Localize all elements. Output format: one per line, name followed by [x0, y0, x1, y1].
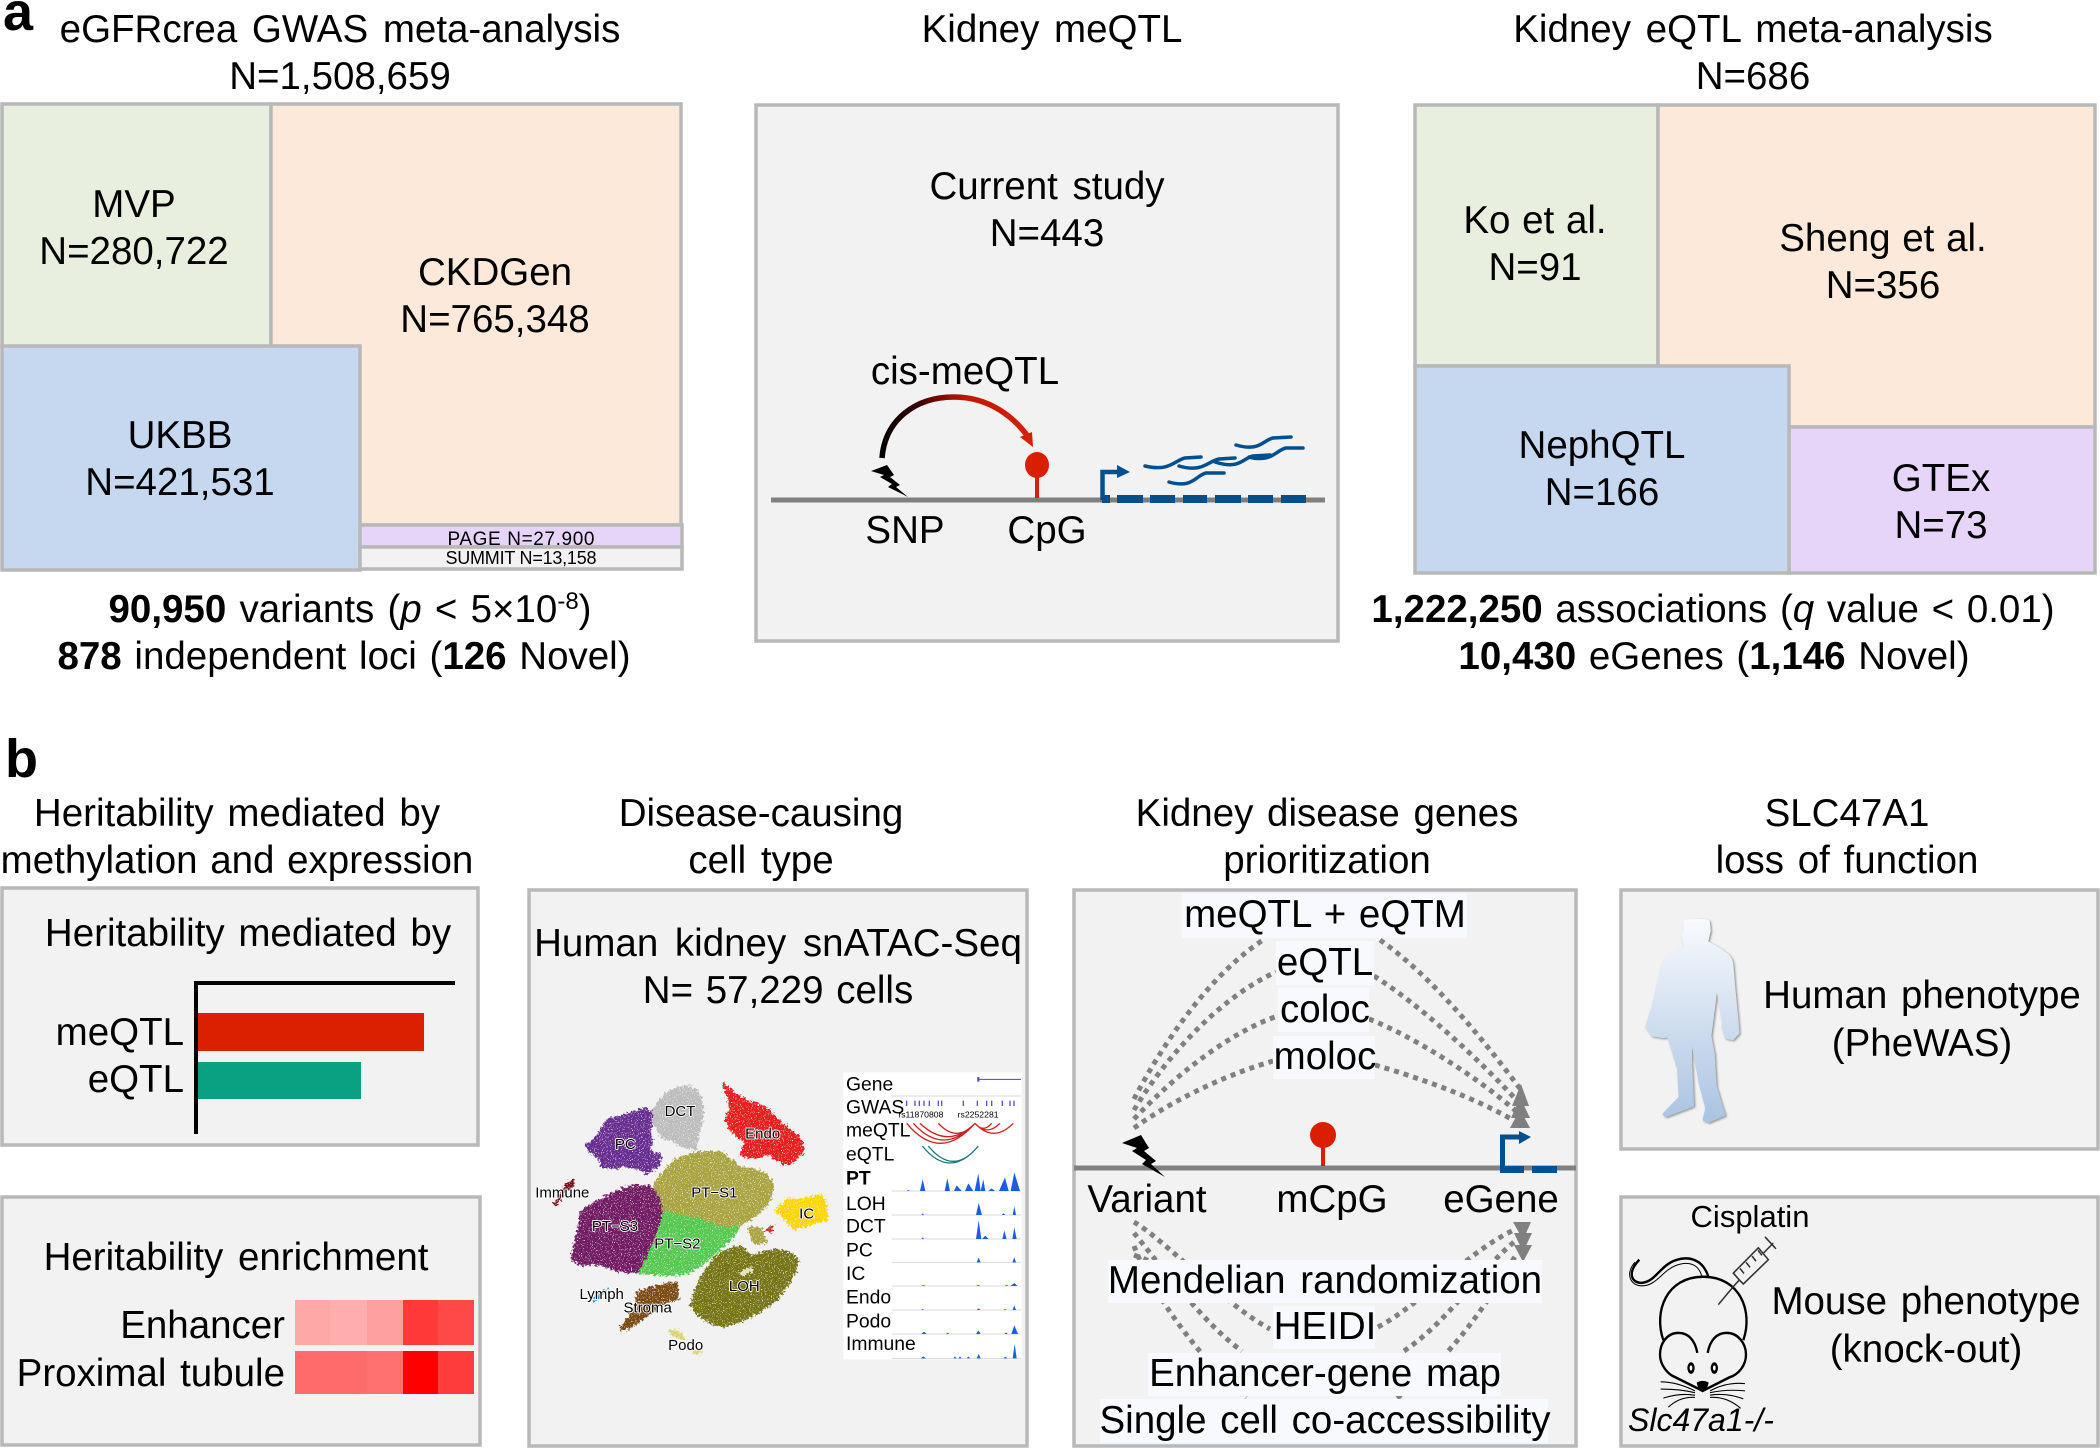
heading: Heritability mediated by methylation and expression: Heritability mediated by [34, 792, 441, 835]
chart: UMAP clusters: Lymph [579, 1286, 624, 1303]
genome line [1074, 1166, 1576, 1170]
cohort box: Sheng et al: Sheng et al. [1779, 217, 1987, 260]
method label: Single cell co-accessibility: Single cell co-accessibility [1099, 1399, 1551, 1442]
cohort box: NephQTL: N=166 [1545, 471, 1659, 514]
cohort box: MVP [2, 104, 271, 347]
result summary: GWAS: -8 [557, 588, 579, 615]
chart: UMAP clusters: Stroma [624, 1299, 672, 1316]
icon: eGene TSS arrow [1500, 1131, 1557, 1173]
icon: CpG lollipop [1025, 452, 1049, 498]
cohort box: NephQTL: NephQTL [1519, 424, 1685, 467]
labels: SNP and CpG [865, 509, 1087, 552]
subheading: snATAC-Seq: N= 57,229 cells [643, 969, 913, 1012]
arrow: SNP to CpG [882, 397, 1033, 458]
study size text: Current study [929, 165, 1165, 208]
labels: SNP and CpG: SNP [865, 509, 945, 552]
chart: UMAP clusters [535, 1085, 827, 1354]
cohort box: CKDGen: N=765,348 [400, 298, 590, 341]
chart: UMAP clusters: Immune [535, 1185, 589, 1202]
chart: genome browser tracks: meQTL [846, 1121, 911, 1142]
cohort box: SUMMIT: SUMMIT N=13,158 [446, 548, 596, 568]
icon: gene with TSS arrow [1102, 465, 1306, 503]
cohort box: PAGE: PAGE N=27.900 [448, 529, 594, 550]
dotted arrows: upper methods [1134, 940, 1530, 1128]
chart: genome browser tracks: Gene [846, 1075, 893, 1096]
chart: genome browser tracks: rs11870808 [898, 1110, 944, 1120]
icon: mRNA transcripts [1145, 437, 1303, 484]
cohort box: Ko et al: N=91 [1488, 246, 1582, 289]
cohort box: UKBB: UKBB [128, 414, 232, 457]
method label: HEIDI: HEIDI [1274, 1305, 1376, 1348]
icon: mouse with syringe [1630, 1237, 1776, 1408]
subheading: snATAC-Seq: Human kidney snATAC-Seq [534, 922, 1022, 965]
card: heritability mediated bar chart: Heritability mediated by [45, 912, 452, 955]
heading: Disease-causing cell type: Disease-causing [619, 792, 903, 835]
cohort box: CKDGen [271, 104, 681, 525]
result summary: eQTL: 1,222,250 associations (q value < 0.01) [1371, 588, 2055, 631]
card: heritability enrichment heatmap: Heritability enrichment [44, 1236, 429, 1279]
chart: UMAP clusters: PT−S3 [592, 1218, 638, 1235]
method label: Mendelian randomization: Mendelian randomization [1108, 1259, 1542, 1302]
card: heritability enrichment heatmap: Enhancer [120, 1304, 285, 1347]
result summary: GWAS: 878 independent loci (126 Novel) [57, 635, 631, 678]
cohort box: SUMMIT [360, 547, 682, 569]
card: mouse phenotype: (knock-out) [1830, 1328, 2022, 1371]
labels: SNP and CpG: CpG [1007, 509, 1087, 552]
cohort box: Sheng et al: N=356 [1826, 264, 1940, 307]
heading: Heritability mediated by methylation and expression [1, 792, 473, 882]
card: human phenotype: (PheWAS) [1832, 1022, 2012, 1065]
panel: SLC47A1 loss of function [1621, 792, 2098, 1446]
chart: genome browser tracks: rs2252281 [958, 1110, 999, 1120]
cohort box: Ko et al [1415, 105, 1658, 366]
cohort box: GTEx [1789, 427, 2095, 573]
card: heritability enrichment heatmap: Proximal tubule [17, 1352, 285, 1395]
heading: SLC47A1 loss of function: loss of function [1716, 839, 1978, 882]
chart: UMAP clusters: PT−S2 [654, 1235, 700, 1252]
heading: Kidney meQTL: Kidney meQTL [922, 8, 1182, 51]
heading: Kidney eQTL meta-analysis [1513, 8, 1993, 98]
panel: GWAS meta-analysis [2, 8, 682, 678]
panel: Disease-causing cell type [529, 792, 1027, 1446]
card: human phenotype: Human phenotype [1763, 974, 2081, 1017]
icon: SNP lightning [871, 465, 908, 497]
card: human phenotype [1621, 890, 2098, 1149]
cohort box: CKDGen: CKDGen [418, 251, 572, 294]
heading: Kidney eQTL meta-analysis: N=686 [1696, 55, 1810, 98]
chart: genome browser tracks: Immune [846, 1334, 916, 1355]
card: heritability enrichment heatmap [2, 1197, 480, 1445]
card: mouse phenotype [1621, 1197, 2098, 1446]
card: heritability mediated bar chart [2, 888, 478, 1145]
panel letter b: b [5, 729, 38, 789]
dotted arrows: lower methods [1134, 1222, 1532, 1398]
result summary: GWAS: ) [579, 588, 592, 631]
cohort box: Sheng et al [1658, 105, 2095, 427]
cohort box: PAGE [360, 525, 682, 550]
bar chart [56, 983, 455, 1134]
labels: Variant mCpG eGene [1087, 1178, 1559, 1221]
heading: Heritability mediated by methylation and expression: methylation and expression [1, 839, 473, 882]
chart: genome browser tracks: GWAS [846, 1097, 904, 1118]
cohort box: MVP: MVP [92, 183, 176, 226]
heading: Kidney disease genes prioritization [1136, 792, 1518, 882]
cohort box: GTEx: N=73 [1894, 504, 1988, 547]
label: cis-meQTL: cis-meQTL [871, 350, 1059, 393]
method label: eQTL: eQTL [1277, 941, 1373, 984]
cohort box: MVP: N=280,722 [39, 230, 229, 273]
card: mouse phenotype: Cisplatin [1691, 1199, 1809, 1234]
chart: genome browser tracks: Podo [846, 1311, 891, 1332]
chart: UMAP clusters: LOH [729, 1278, 760, 1295]
chart: UMAP clusters: DCT [665, 1103, 695, 1120]
heading: eGFRcrea GWAS meta-analysis: N=1,508,659 [229, 55, 451, 98]
chart: UMAP clusters: Endo [745, 1126, 780, 1143]
heading: Kidney disease genes prioritization: Kidney disease genes [1136, 792, 1518, 835]
heading: eGFRcrea GWAS meta-analysis [60, 8, 620, 98]
cohort box: NephQTL [1415, 366, 1789, 573]
cohort box: GTEx: GTEx [1892, 457, 1990, 500]
panel background [756, 105, 1338, 641]
labels: Variant mCpG eGene: Variant [1087, 1178, 1207, 1221]
result summary: eQTL: 10,430 eGenes (1,146 Novel) [1458, 635, 1970, 678]
heading: Kidney disease genes prioritization: prioritization [1223, 839, 1431, 882]
cohort box: UKBB [2, 346, 360, 570]
method label: moloc: moloc [1274, 1035, 1376, 1078]
panel: Heritability [1, 792, 480, 1445]
method label: coloc: coloc [1280, 988, 1370, 1031]
method label: meQTL + eQTM: meQTL + eQTM [1184, 893, 1466, 936]
panel: Kidney eQTL meta-analysis [1371, 8, 2095, 678]
heading: Kidney eQTL meta-analysis: Kidney eQTL meta-analysis [1513, 8, 1993, 51]
panel: Kidney meQTL [756, 8, 1338, 641]
chart: UMAP clusters: Podo [668, 1337, 703, 1354]
result summary: GWAS [57, 588, 631, 678]
method label: Enhancer-gene map: Enhancer-gene map [1149, 1352, 1501, 1395]
cohort box: UKBB: N=421,531 [85, 461, 275, 504]
chart: UMAP clusters: IC [799, 1205, 814, 1222]
icon: mCpG lollipop [1310, 1122, 1336, 1166]
chart: UMAP clusters: PC [615, 1136, 636, 1153]
card: mouse phenotype: Mouse phenotype [1771, 1280, 2081, 1323]
result summary: eQTL [1371, 588, 2055, 678]
chart: genome browser tracks [843, 1072, 1022, 1359]
chart: genome browser tracks: DCT [846, 1217, 886, 1238]
chart: genome browser tracks: IC [846, 1264, 865, 1285]
heading: eGFRcrea GWAS meta-analysis: eGFRcrea GWAS meta-analysis [60, 8, 620, 51]
heading: Disease-causing cell type [619, 792, 903, 882]
heatmap [295, 1300, 474, 1394]
study size text [929, 165, 1165, 255]
panel background [529, 890, 1027, 1446]
heading: SLC47A1 loss of function: SLC47A1 [1765, 792, 1929, 835]
bar chart: meQTL [56, 1011, 184, 1054]
icon: human silhouette [1647, 920, 1738, 1121]
result summary: GWAS: 90,950 variants (p < 5×10 [108, 588, 557, 631]
labels: Variant mCpG eGene: eGene [1443, 1178, 1559, 1221]
chart: genome browser tracks: LOH [846, 1194, 886, 1215]
genome line [771, 498, 1325, 502]
chart: genome browser tracks: PC [846, 1241, 873, 1262]
chart: UMAP clusters: PT−S1 [691, 1184, 737, 1201]
chart: genome browser tracks: eQTL [846, 1145, 895, 1166]
chart: genome browser tracks: Endo [846, 1287, 891, 1308]
subheading: snATAC-Seq [534, 922, 1022, 1012]
study size text: N=443 [990, 212, 1104, 255]
icon: variant lightning [1122, 1135, 1165, 1177]
chart: genome browser tracks: PT [846, 1169, 871, 1190]
panel background [1074, 890, 1576, 1446]
heading: SLC47A1 loss of function [1716, 792, 1978, 882]
labels: Variant mCpG eGene: mCpG [1276, 1178, 1388, 1221]
cohort box: Ko et al: Ko et al. [1463, 199, 1607, 242]
panel: Kidney disease genes prioritization [1074, 792, 1576, 1446]
heading: Disease-causing cell type: cell type [688, 839, 834, 882]
bar chart: eQTL [88, 1058, 184, 1101]
card: mouse phenotype: Slc47a1-/- [1628, 1402, 1774, 1438]
